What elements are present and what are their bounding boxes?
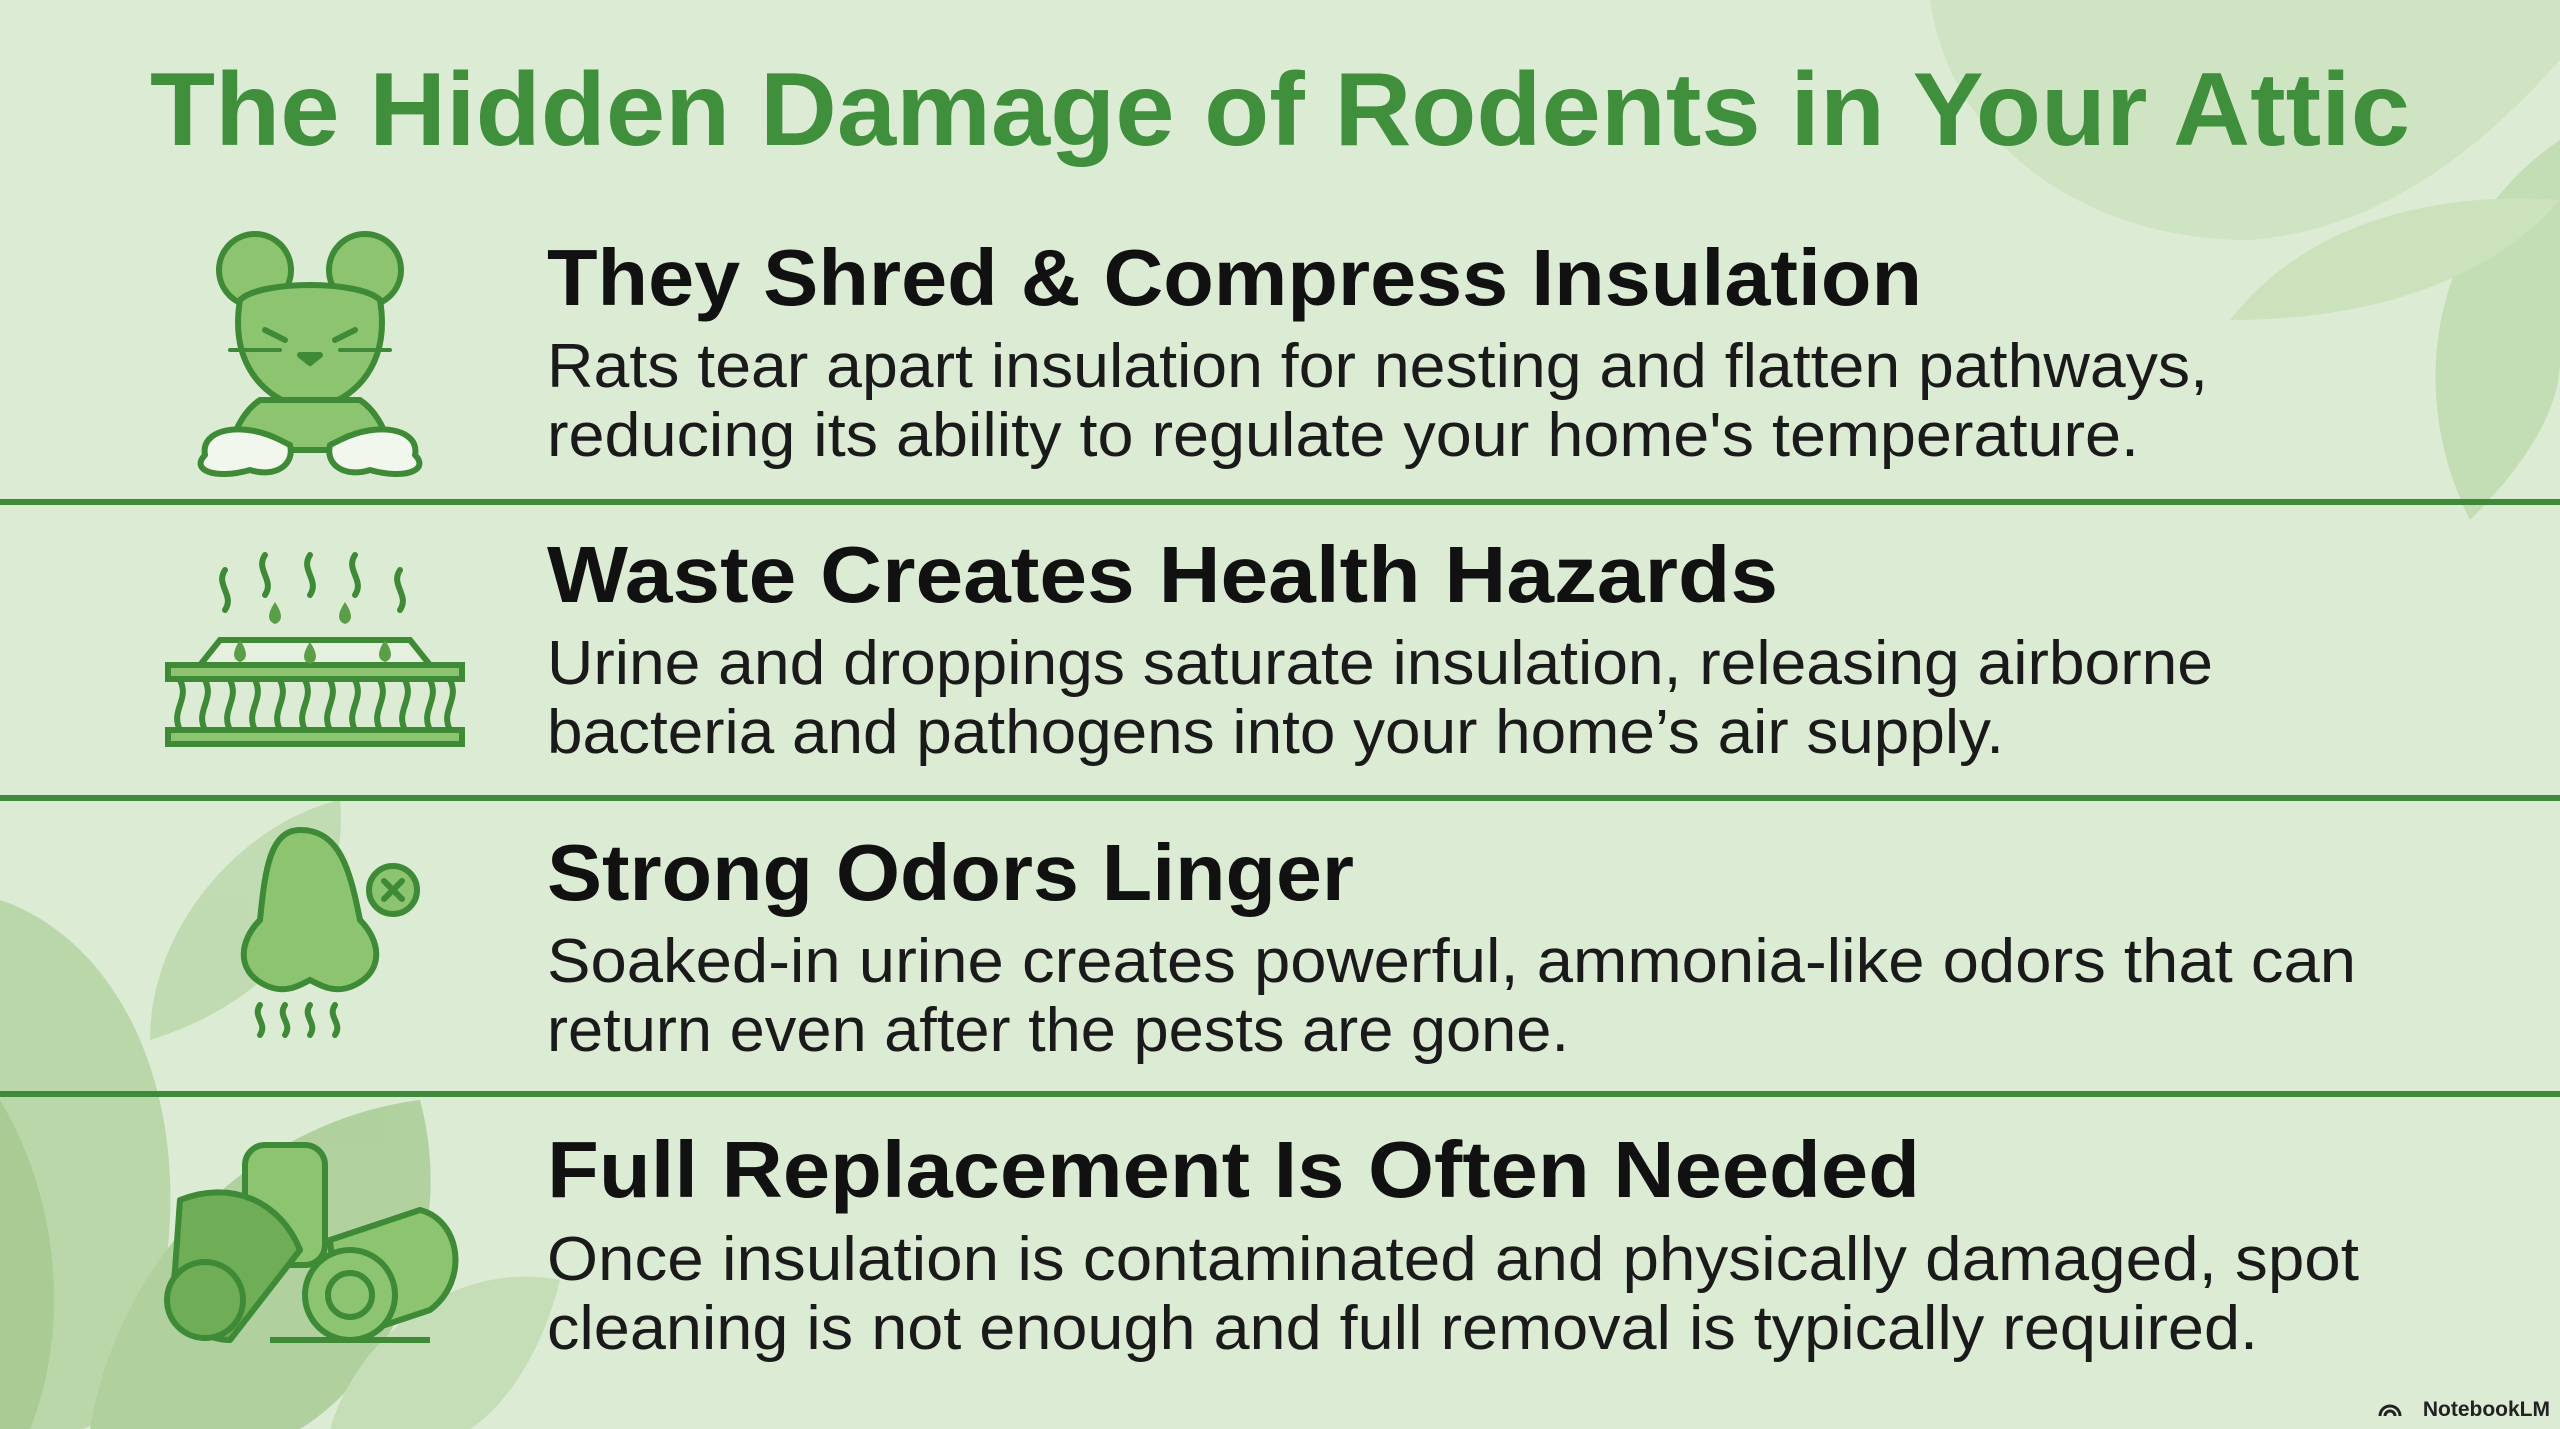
- row 1 text: reducing its ability to regulate your home's temperature.: [547, 401, 2139, 470]
- dividers: [0, 499, 2560, 1097]
- title: The Hidden Damage of Rodents in Your Attic: [150, 52, 2410, 168]
- row 4 text: [547, 1125, 2359, 1363]
- row 4 text: Full Replacement Is Often Needed: [547, 1125, 1920, 1214]
- row 3 text: return even after the pests are gone.: [547, 996, 1569, 1065]
- row 1 text: [547, 233, 2208, 470]
- row 1 text: They Shred & Compress Insulation: [547, 233, 1922, 322]
- icon: nose with x: [244, 830, 417, 1035]
- row 4 text: cleaning is not enough and full removal is typically required.: [547, 1294, 2258, 1363]
- row 2 text: [547, 530, 2213, 767]
- icon: rat shredding insulation: [201, 234, 419, 474]
- row 3 text: Strong Odors Linger: [547, 828, 1354, 917]
- row 1 text: Rats tear apart insulation for nesting and flatten pathways,: [547, 332, 2208, 401]
- row 2 text: Waste Creates Health Hazards: [547, 530, 1778, 619]
- row 3 text: [547, 828, 2356, 1065]
- row 4 text: Once insulation is contaminated and physically damaged, spot: [547, 1225, 2359, 1294]
- background leaves top right: [1930, 0, 2560, 520]
- row 2 text: Urine and droppings saturate insulation, releasing airborne: [547, 629, 2213, 698]
- icon: contaminated insulation: [168, 555, 462, 744]
- logo: NotebookLM: NotebookLM: [2423, 1398, 2550, 1421]
- icon: rolled insulation: [167, 1145, 455, 1340]
- row 2 text: bacteria and pathogens into your home’s air supply.: [547, 698, 2004, 767]
- row 3 text: Soaked-in urine creates powerful, ammonia-like odors that can: [547, 927, 2356, 996]
- background leaves bottom left: [0, 800, 560, 1429]
